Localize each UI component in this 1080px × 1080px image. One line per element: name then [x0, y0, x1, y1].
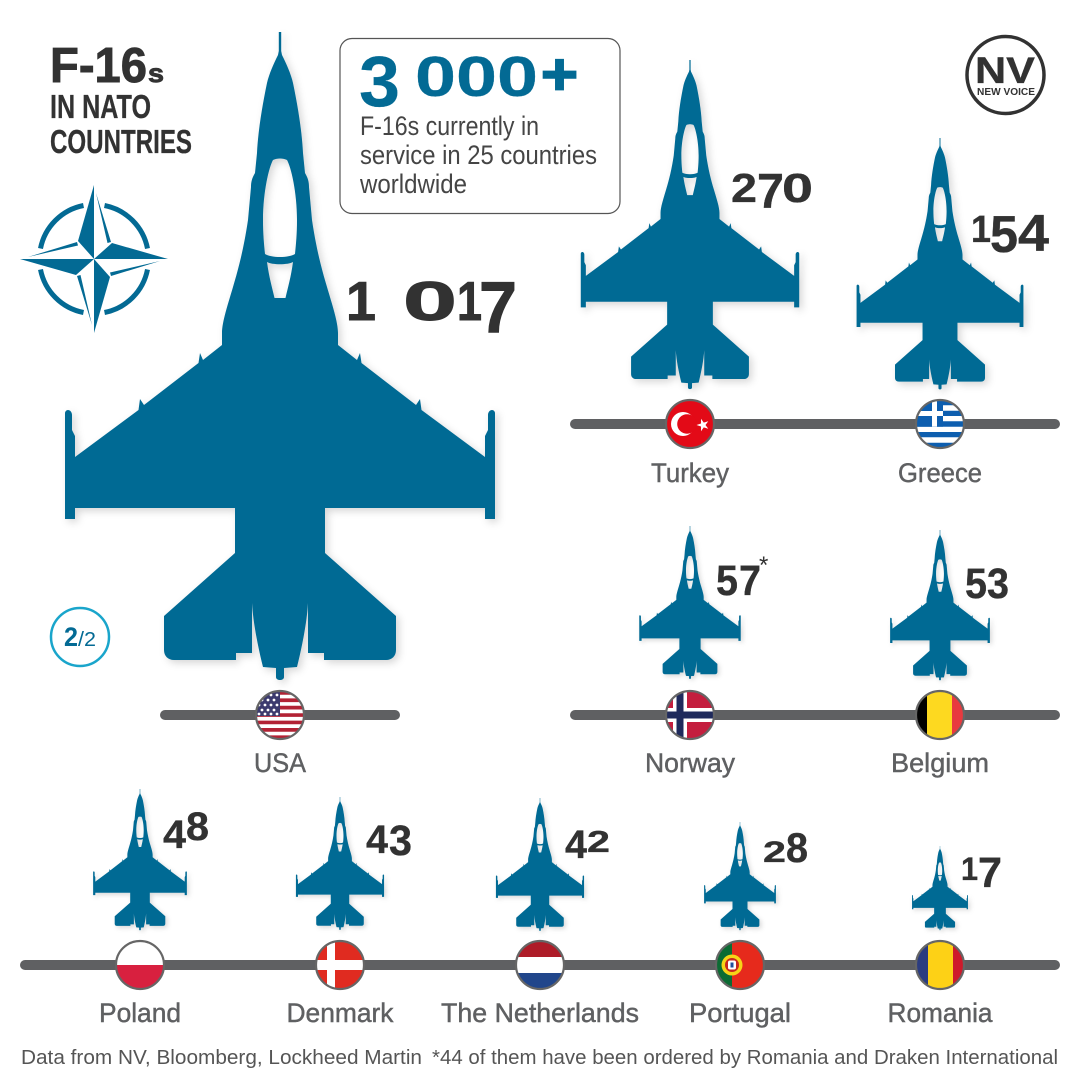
value: Greece count: 1: [971, 209, 991, 251]
value: Portugal count: [763, 824, 808, 871]
icon: Belgium jet: [890, 530, 990, 680]
flag: Turkey: [665, 399, 715, 449]
column: Poland: [93, 789, 209, 1028]
callout: 3 000+ worldwide: F-16s currently in: [360, 111, 539, 141]
callout: 3 000+ worldwide: 3: [359, 43, 400, 122]
callout: 3 000+ worldwide: worldwide: [359, 169, 467, 199]
value: Denmark count: 4: [366, 818, 389, 862]
callout: 3 000+ worldwide: +: [541, 42, 578, 107]
value: Poland count: 4: [163, 813, 187, 857]
value: Greece count: [971, 205, 1049, 264]
column: Denmark: [286, 797, 412, 1028]
value: Turkey count: 0: [782, 165, 813, 211]
value: Norway count: [716, 552, 768, 605]
value: Romania count: 7: [978, 849, 1002, 897]
value: USA count: 1: [457, 270, 482, 332]
flag: Norway: [665, 690, 715, 740]
value: Poland count: 8: [186, 805, 209, 849]
value: Denmark count: [366, 817, 412, 865]
flag: Poland: [115, 940, 165, 990]
label: Greece: Greece: [898, 458, 982, 488]
value: Belgium count: 5: [965, 560, 987, 608]
column: Romania: [888, 846, 1002, 1028]
flag: Portugal: [715, 940, 765, 990]
label: USA: USA: [254, 748, 306, 778]
logo: NV New Voice: [967, 36, 1044, 114]
value: Norway count: 5: [716, 557, 738, 605]
icon: Denmark jet: [296, 797, 384, 930]
title: [50, 39, 192, 160]
badge: page 2 of 2: 2: [64, 622, 78, 652]
badge: page 2 of 2: /2: [78, 629, 96, 651]
value: Portugal count: 2: [763, 836, 786, 869]
icon: Greece jet: [857, 138, 1023, 389]
label: Portugal: Portugal: [689, 998, 791, 1028]
column: USA: [65, 32, 517, 778]
icon: Norway jet: [639, 526, 741, 679]
value: Netherlands count: 4: [565, 823, 588, 867]
flag: Belgium: [915, 690, 965, 740]
value: Belgium count: 3: [987, 560, 1009, 608]
icon: USA jet: [65, 32, 495, 680]
title: s: [148, 58, 164, 88]
callout: 3 000+ worldwide: [340, 38, 620, 214]
label: Norway: Norway: [645, 748, 735, 778]
value: Portugal count: 8: [786, 824, 808, 871]
value: Norway count: 7: [739, 557, 761, 605]
column: Belgium: [890, 530, 1009, 778]
icon: Portugal jet: [704, 822, 776, 930]
logo: NV New Voice: NEW VOICE: [977, 86, 1035, 98]
value: Turkey count: 7: [757, 165, 784, 219]
label: Poland: Poland: [99, 998, 181, 1028]
column: Portugal: [689, 822, 808, 1028]
value: Denmark count: 3: [389, 817, 412, 865]
column: The Netherlands: [441, 798, 639, 1028]
badge: page 2 of 2: [51, 608, 109, 666]
icon: Romania jet: [912, 846, 968, 930]
label: The Netherlands: The Netherlands: [441, 998, 639, 1028]
label: Belgium: Belgium: [891, 748, 989, 778]
value: Netherlands count: 2: [587, 824, 610, 859]
title: F-16: [50, 39, 147, 93]
footnote: Data from NV, Bloomberg, Lockheed Martin: [21, 1047, 422, 1069]
callout: 3 000+ worldwide: 0: [415, 45, 456, 109]
flag: Greece: [915, 399, 965, 449]
value: Norway count: *: [759, 552, 768, 579]
value: USA count: 7: [479, 268, 517, 348]
value: Romania count: [961, 849, 1002, 897]
value: Greece count: 5: [990, 206, 1018, 264]
icon: Turkey jet: [581, 60, 799, 389]
icon: NATO compass star: [20, 185, 168, 333]
value: Poland count: [163, 805, 209, 857]
callout: 3 000+ worldwide: service in 25 countries: [360, 140, 597, 170]
value: Belgium count: [965, 560, 1009, 608]
callout: 3 000+ worldwide: 0: [456, 45, 497, 109]
footnote: *44 of them have been ordered by Romania and Draken International: [432, 1047, 1058, 1069]
value: Turkey count: 2: [731, 165, 757, 211]
value: USA count: 0: [403, 270, 457, 332]
icon: Poland jet: [93, 789, 187, 930]
icon: Netherlands jet: [496, 798, 584, 931]
title: IN NATO: [50, 88, 151, 125]
column: Norway: [639, 526, 768, 778]
value: USA count: 1: [346, 270, 376, 332]
callout: 3 000+ worldwide: 0: [497, 45, 538, 109]
footnote: [21, 1047, 1058, 1069]
flag: USA: [255, 690, 305, 740]
value: Greece count: 4: [1018, 205, 1049, 263]
value: Romania count: 1: [961, 851, 978, 887]
flag: Denmark: [315, 940, 365, 990]
logo: NV New Voice: NV: [975, 50, 1035, 91]
flag: The Netherlands: [515, 940, 565, 990]
column: Greece: [857, 138, 1049, 488]
column: Turkey: [581, 60, 813, 488]
label: Denmark: Denmark: [286, 998, 394, 1028]
value: USA count: [346, 268, 517, 348]
timeline rails: [20, 419, 1060, 970]
value: Turkey count: [731, 165, 813, 219]
label: Turkey: Turkey: [651, 458, 729, 488]
value: Netherlands count: [565, 823, 610, 867]
title: COUNTRIES: [50, 123, 192, 160]
flag: Romania: [915, 940, 965, 990]
label: Romania: Romania: [888, 998, 993, 1028]
